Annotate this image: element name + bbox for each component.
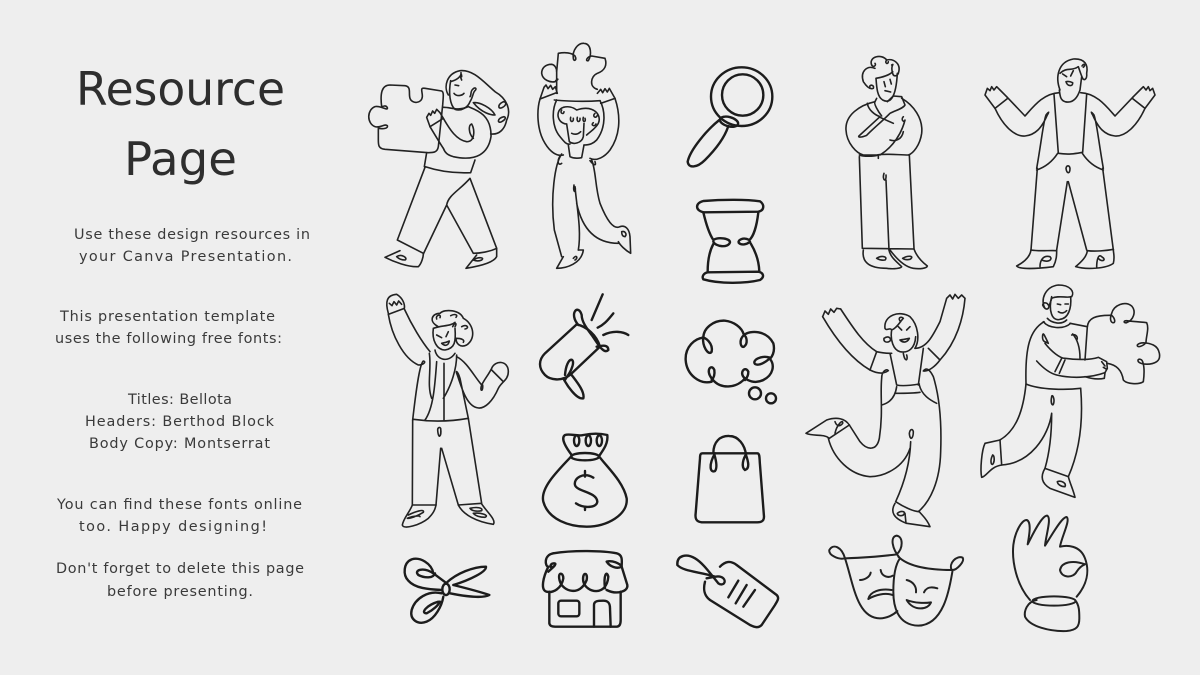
icon: thought cloud	[686, 321, 776, 403]
figure: woman carrying puzzle piece	[369, 71, 509, 268]
icon: money bag	[543, 434, 627, 527]
icon: price tag	[677, 556, 778, 627]
text block: font list: Body Copy: Montserrat	[89, 436, 270, 452]
figure: person jumping	[806, 294, 965, 527]
text block: delete reminder	[56, 561, 304, 600]
text block: font list	[85, 392, 275, 452]
text block: intro: your Canva Presentation.	[79, 249, 292, 265]
figure: man thinking with hand on chin	[846, 56, 927, 269]
text block: fonts intro	[55, 309, 282, 347]
text block: font list: Headers: Berthod Block	[85, 414, 275, 430]
text block: intro: Use these design resources in	[74, 227, 310, 243]
figure: person in overalls lifting puzzle piece	[538, 43, 631, 268]
text block: fonts intro: This presentation template	[59, 309, 275, 325]
icon: theatre masks	[829, 536, 963, 626]
title	[76, 62, 285, 186]
text block: find fonts: You can find these fonts online	[56, 497, 302, 513]
title: Resource	[76, 62, 285, 116]
text block: delete reminder: before presenting.	[107, 584, 253, 600]
text block: find fonts	[56, 497, 302, 535]
text block: font list: Titles: Bellota	[127, 392, 232, 408]
title: Page	[124, 132, 237, 186]
icon: hand OK gesture	[1013, 516, 1087, 631]
text block: intro	[74, 227, 310, 265]
figure: person waving with raised arm	[387, 294, 508, 527]
icon: store front	[543, 551, 627, 627]
icon: scissors	[405, 559, 489, 623]
text block: fonts intro: uses the following free fonts:	[55, 331, 282, 347]
text block: delete reminder: Don't forget to delete this page	[56, 561, 304, 577]
figure: man shrugging	[985, 59, 1155, 268]
icon: magnifying glass	[688, 67, 772, 166]
figure: man holding large puzzle piece	[981, 285, 1160, 497]
icon: megaphone	[540, 294, 628, 398]
icon: shopping bag	[695, 436, 764, 522]
text block: find fonts: too. Happy designing!	[79, 519, 267, 535]
icon: hourglass	[697, 200, 763, 283]
